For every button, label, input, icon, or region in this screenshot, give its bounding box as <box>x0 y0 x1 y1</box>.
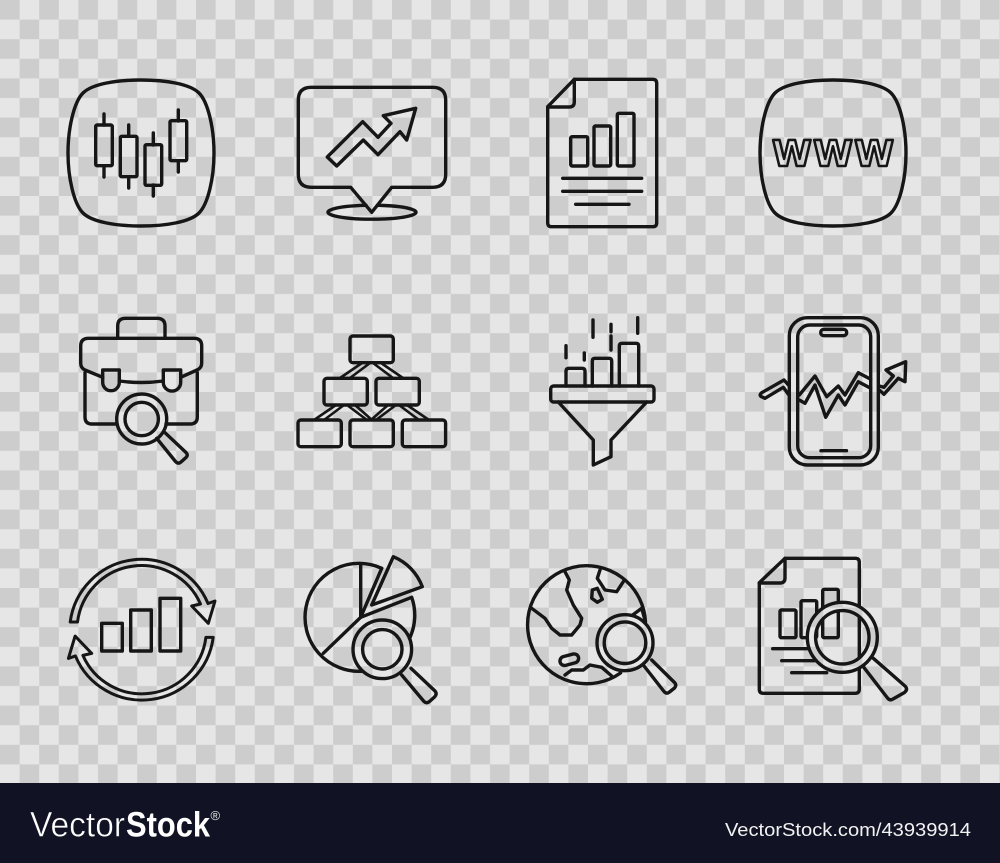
footer logo <box>30 806 220 844</box>
icon: smartphone with trend line <box>760 318 906 465</box>
icon: funnel with bars <box>551 318 654 465</box>
icon: hierarchy diagram <box>298 336 446 447</box>
icon grid <box>68 79 907 703</box>
icon: document with chart under magnifier <box>759 558 907 700</box>
icon: briefcase with magnifier <box>81 318 202 463</box>
icon: speech bubble with rising arrow <box>298 87 446 219</box>
icon: circular arrows with bar chart <box>68 559 215 700</box>
icon: www in rounded square: WWW <box>772 134 894 175</box>
icon: candlestick chart in rounded square <box>68 80 214 226</box>
footer image id: VectorStock.com/43939914 <box>725 819 971 840</box>
icon: pie chart with magnifier <box>305 557 436 703</box>
icon: globe with magnifier <box>528 566 676 693</box>
footer bar <box>0 783 1000 863</box>
footer logo: Vector <box>30 806 125 844</box>
icon: www in rounded square <box>760 80 906 226</box>
footer logo: ® <box>210 808 220 823</box>
icon: document with bar chart <box>548 79 657 227</box>
footer logo: Stock <box>126 806 210 844</box>
